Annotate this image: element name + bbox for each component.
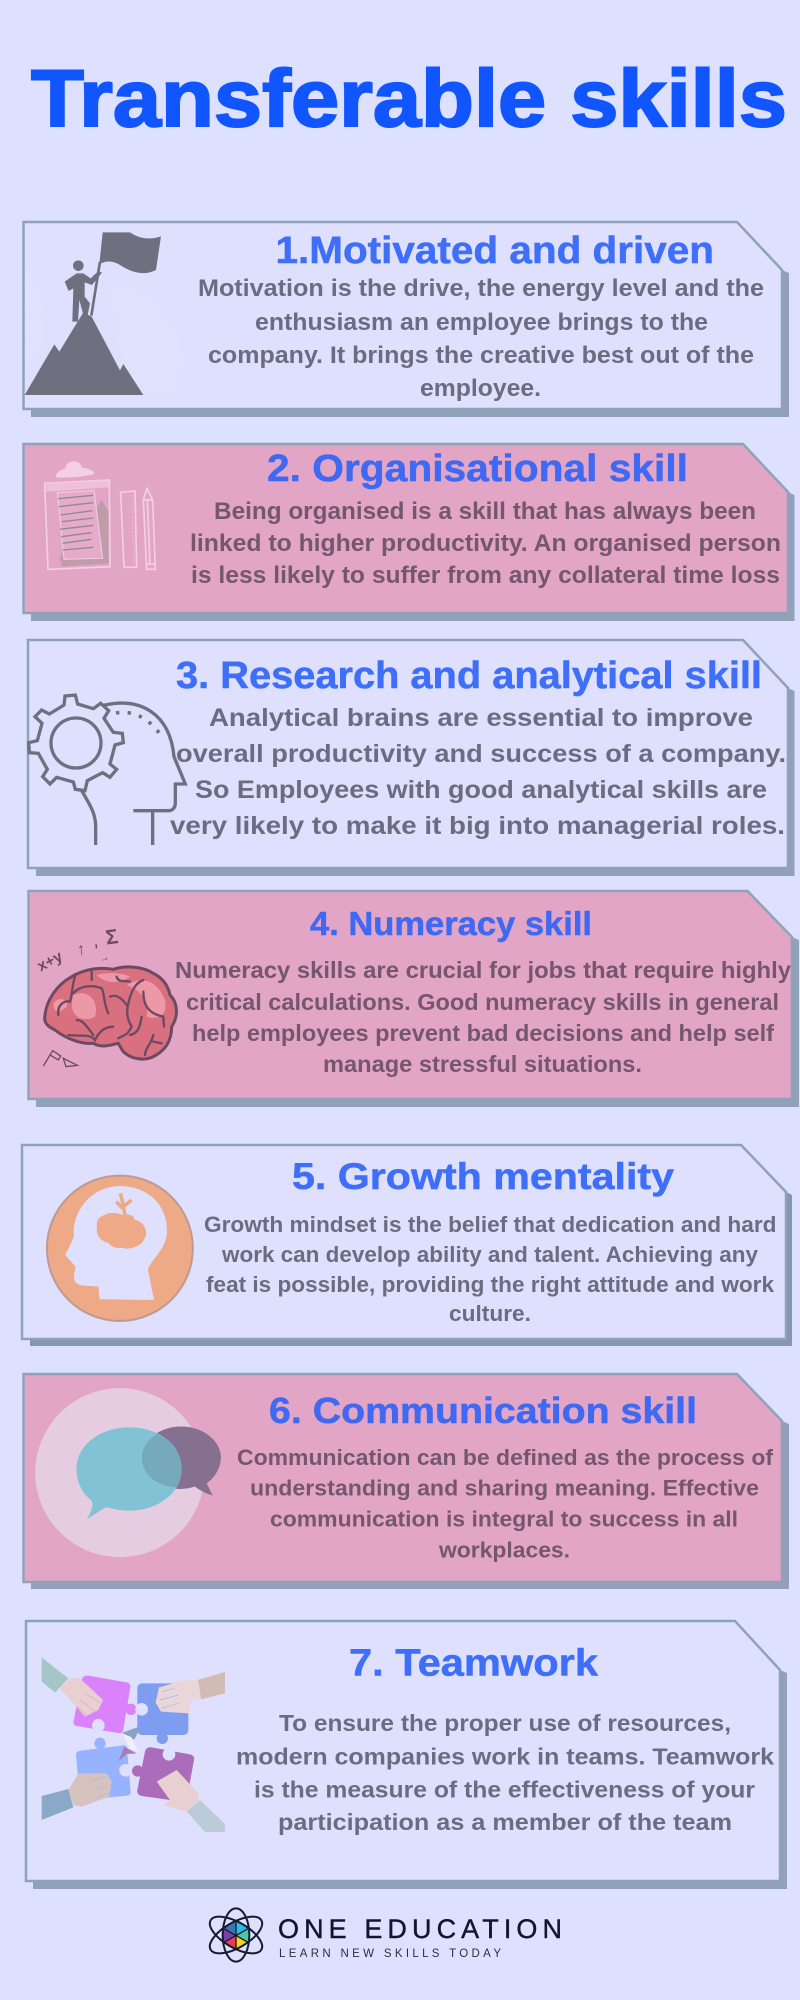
- panel shape: [28, 640, 788, 868]
- body text: company. It brings the creative best out of the: [208, 342, 754, 369]
- title: Transferable skills: [31, 54, 787, 144]
- body text: modern companies work in teams. Teamwork: [236, 1744, 774, 1770]
- body text: work can develop ability and talent. Achieving any: [221, 1242, 759, 1267]
- body text: communication is integral to success in all: [270, 1506, 738, 1532]
- body text: very likely to make it big into managerial roles.: [170, 812, 785, 840]
- maths symbols: ,: [93, 934, 98, 950]
- icon: speech bubbles: [35, 1388, 221, 1557]
- body text: Growth mindset is the belief that dedication and hard: [204, 1212, 776, 1237]
- maths symbols: Σ: [104, 925, 120, 950]
- icon: climber with flag on mountain: [25, 232, 183, 395]
- finger lines: [77, 1688, 178, 1798]
- body text: understanding and sharing meaning. Effective: [250, 1476, 759, 1500]
- body text: So Employees with good analytical skills are: [195, 776, 767, 804]
- panel: 3 research and analytical skill: [28, 640, 794, 876]
- body text: [204, 1212, 776, 1326]
- panel shadow: [33, 1670, 787, 1889]
- body text: help employees prevent bad decisions and help self: [192, 1020, 774, 1046]
- body text: To ensure the proper use of resources,: [279, 1710, 731, 1736]
- panel shape: [24, 222, 782, 409]
- maths symbols: →: [98, 952, 111, 965]
- panel shape: [24, 444, 788, 613]
- tagline: LEARN NEW SKILLS TODAY: [279, 1948, 501, 1960]
- panel: 4 numeracy skill: [28, 891, 799, 1107]
- icon: head with gear: [29, 695, 185, 845]
- heading: 6. Communication skill: [269, 1390, 697, 1431]
- panel shape: [24, 1374, 782, 1582]
- body text: [198, 275, 764, 402]
- body text: culture.: [449, 1301, 531, 1326]
- body text: Communication can be defined as the process of: [237, 1445, 774, 1470]
- panel shadow: [36, 937, 799, 1107]
- heading: 4. Numeracy skill: [310, 905, 592, 942]
- panel: 5 growth mentality: [22, 1145, 792, 1346]
- body text: Being organised is a skill that has always been: [214, 498, 756, 525]
- body text: [175, 957, 791, 1077]
- wordmark: ONE EDUCATION: [278, 1914, 562, 1944]
- panel shape: [26, 1621, 780, 1881]
- body text: is the measure of the effectiveness of your: [254, 1776, 755, 1802]
- panel: 7 teamwork: [26, 1621, 787, 1889]
- body text: critical calculations. Good numeracy skills in general: [186, 989, 779, 1015]
- panel shadow: [31, 1421, 789, 1589]
- panel: 6 communication skill: [24, 1374, 789, 1589]
- body text: feat is possible, providing the right attitude and work: [206, 1272, 775, 1297]
- hands: [42, 1657, 225, 1832]
- panel shadow: [36, 688, 794, 876]
- icon: head with growing brain: [47, 1176, 193, 1321]
- heading: 3. Research and analytical skill: [176, 655, 762, 697]
- panel: 1 motivated and driven: [24, 222, 789, 417]
- heading: 2. Organisational skill: [267, 448, 688, 490]
- maths symbols: [35, 925, 120, 975]
- body text: employee.: [420, 375, 541, 402]
- icon: hands joining puzzle pieces: [42, 1657, 225, 1832]
- heading: 5. Growth mentality: [292, 1156, 674, 1197]
- heading: 1.Motivated and driven: [276, 230, 714, 272]
- body text: enthusiasm an employee brings to the: [255, 309, 708, 336]
- maths symbols: ↑: [76, 939, 86, 959]
- icon: clipboard, ruler and pencil: [45, 461, 155, 569]
- panel shadow: [31, 270, 789, 417]
- panel shape: [28, 891, 792, 1099]
- panel shadow: [31, 492, 794, 621]
- body text: overall productivity and success of a company.: [176, 740, 786, 768]
- body text: manage stressful situations.: [323, 1051, 642, 1077]
- logo: One Education: [204, 1908, 562, 1962]
- body text: [170, 704, 786, 840]
- body text: Motivation is the drive, the energy level and the: [198, 275, 764, 302]
- body text: [237, 1445, 774, 1562]
- body text: Numeracy skills are crucial for jobs that require highly: [175, 957, 791, 983]
- icon: brain with maths symbols: [35, 925, 176, 1067]
- maths symbols: x+y: [35, 948, 66, 975]
- centre star: [118, 1726, 141, 1762]
- body text: [236, 1710, 774, 1835]
- body text: is less likely to suffer from any collateral time loss: [191, 562, 780, 589]
- icon: atom with hexagon: [204, 1908, 268, 1962]
- panel shape: [22, 1145, 786, 1339]
- body text: workplaces.: [438, 1538, 570, 1562]
- heading: 7. Teamwork: [349, 1642, 599, 1684]
- body text: [190, 498, 781, 589]
- body text: participation as a member of the team: [278, 1809, 732, 1835]
- panel: 2 organisational skill: [24, 444, 794, 621]
- body text: linked to higher productivity. An organised person: [190, 530, 781, 557]
- body text: Analytical brains are essential to improve: [209, 704, 753, 732]
- panel shadow: [30, 1192, 792, 1346]
